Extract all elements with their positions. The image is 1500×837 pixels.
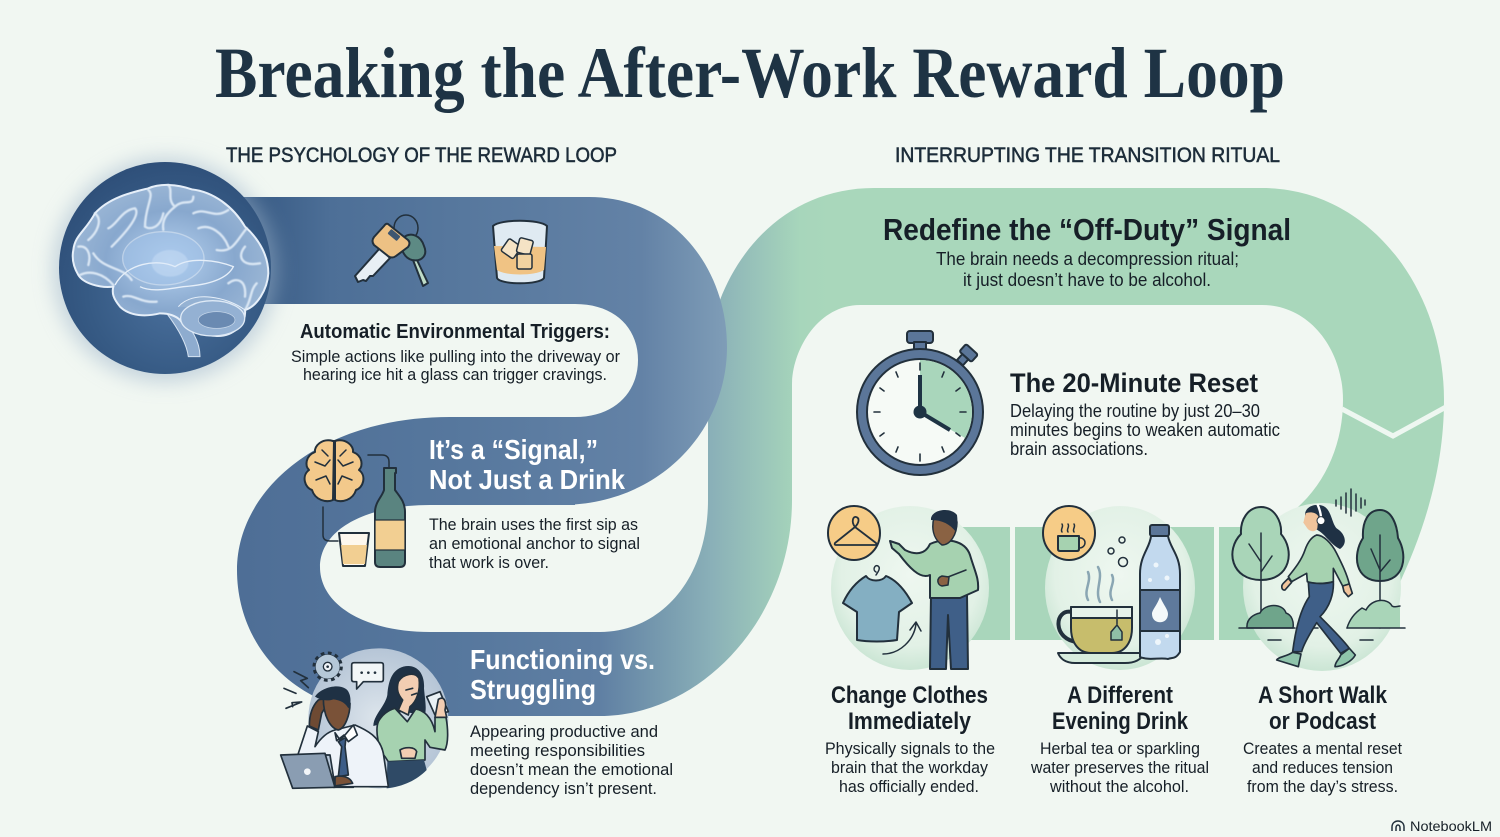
- text block: 20-minute reset: Delaying the routine by just 20–30: [1010, 401, 1260, 421]
- text block: redefine off-duty signal: [883, 212, 1291, 290]
- text block: different evening drink: [1030, 682, 1209, 796]
- text block: 20-minute reset: The 20-Minute Reset: [1010, 368, 1258, 398]
- icon: walk with podcast: [1232, 489, 1405, 671]
- text block: signal: It’s a “Signal,”: [429, 434, 598, 465]
- icon: stopwatch: [857, 331, 983, 475]
- text block: functioning vs struggling: [470, 644, 673, 798]
- text block: short walk or podcast: and reduces tension: [1252, 758, 1393, 777]
- text block: automatic triggers: Simple actions like pulling into the driveway or: [291, 347, 620, 366]
- icon: stressed man and woman with drink: [281, 648, 448, 788]
- icon: change clothes: [828, 506, 989, 670]
- text block: functioning vs struggling: Appearing productive and: [470, 722, 658, 741]
- ribbon chevron notch: [1342, 407, 1446, 436]
- text block: short walk or podcast: Creates a mental reset: [1243, 739, 1402, 758]
- ribbon: green segments behind icons: [959, 527, 1214, 640]
- text block: change clothes: has officially ended.: [839, 777, 979, 796]
- icon: glowing brain: [53, 158, 277, 382]
- text block: different evening drink: without the alcohol.: [1049, 777, 1189, 796]
- text block: signal: [429, 434, 640, 572]
- text block: 20-minute reset: minutes begins to weaken automatic: [1010, 420, 1280, 440]
- ribbon: upper blue band: [240, 197, 727, 505]
- text block: change clothes: Immediately: [848, 708, 972, 735]
- text block: different evening drink: A Different: [1067, 682, 1173, 709]
- icon: small brain, bottle and glass: [305, 440, 405, 567]
- text block: short walk or podcast: from the day’s stress.: [1247, 777, 1398, 796]
- text block: redefine off-duty signal: Redefine the “Off-Duty” Signal: [883, 212, 1291, 247]
- text block: different evening drink: Evening Drink: [1052, 708, 1189, 735]
- text block: change clothes: Change Clothes: [831, 682, 988, 709]
- stress marks: [284, 672, 308, 708]
- text block: functioning vs struggling: meeting responsibilities: [470, 741, 645, 760]
- text block: short walk or podcast: A Short Walk: [1258, 682, 1388, 709]
- text block: redefine off-duty signal: The brain needs a decompression ritual;: [936, 249, 1239, 269]
- text block: short walk or podcast: [1243, 682, 1402, 796]
- trees: [1232, 507, 1405, 640]
- NotebookLM watermark: NotebookLM: [1410, 818, 1492, 834]
- sound wave: [1336, 489, 1365, 516]
- text block: signal: The brain uses the first sip as: [429, 515, 638, 534]
- section heading: interrupting: INTERRUPTING THE TRANSITION RITUAL: [895, 144, 1280, 167]
- t-shirt: [843, 566, 912, 642]
- text block: short walk or podcast: or Podcast: [1269, 708, 1376, 735]
- icon: herbal tea and sparkling water: [1043, 506, 1195, 670]
- text block: functioning vs struggling: Struggling: [470, 674, 596, 705]
- text block: automatic triggers: Automatic Environmental Triggers:: [300, 321, 610, 343]
- text block: signal: Not Just a Drink: [429, 464, 625, 495]
- text block: automatic triggers: hearing ice hit a glass can trigger cravings.: [303, 365, 607, 384]
- text block: 20-minute reset: brain associations.: [1010, 439, 1148, 459]
- bubbles: [1108, 537, 1128, 566]
- woman: [373, 666, 448, 788]
- section heading: psychology: THE PSYCHOLOGY OF THE REWARD LOOP: [226, 144, 617, 167]
- text block: signal: that work is over.: [429, 553, 549, 572]
- man: [281, 686, 388, 788]
- text block: different evening drink: water preserves the ritual: [1030, 758, 1209, 777]
- gear: [314, 653, 341, 680]
- text block: change clothes: [825, 682, 995, 796]
- text block: different evening drink: Herbal tea or sparkling: [1040, 739, 1200, 758]
- water bottle: [1140, 525, 1180, 659]
- text block: signal: an emotional anchor to signal: [429, 534, 640, 553]
- text block: functioning vs struggling: dependency isn’t present.: [470, 779, 657, 798]
- text block: 20-minute reset: [1010, 368, 1280, 459]
- icon: whisky glass: [493, 221, 547, 283]
- text block: change clothes: Physically signals to the: [825, 739, 995, 758]
- mug badge: [1043, 506, 1095, 560]
- tea cup: [1058, 607, 1146, 663]
- ribbon: lower blue band flowing into green band: [237, 188, 1444, 716]
- title: Breaking the After-Work Reward Loop: [215, 33, 1285, 113]
- hanger badge: [828, 506, 880, 560]
- text block: redefine off-duty signal: it just doesn’t have to be alcohol.: [963, 270, 1211, 290]
- speech bubble: [352, 663, 383, 689]
- text block: automatic triggers: [291, 321, 620, 384]
- text block: change clothes: brain that the workday: [831, 758, 988, 777]
- icon: keys: [355, 215, 428, 286]
- walking woman: [1277, 504, 1355, 667]
- text block: functioning vs struggling: doesn’t mean the emotional: [470, 760, 673, 779]
- steam: [1086, 567, 1113, 602]
- text block: functioning vs struggling: Functioning vs.: [470, 644, 655, 675]
- person: [890, 510, 978, 669]
